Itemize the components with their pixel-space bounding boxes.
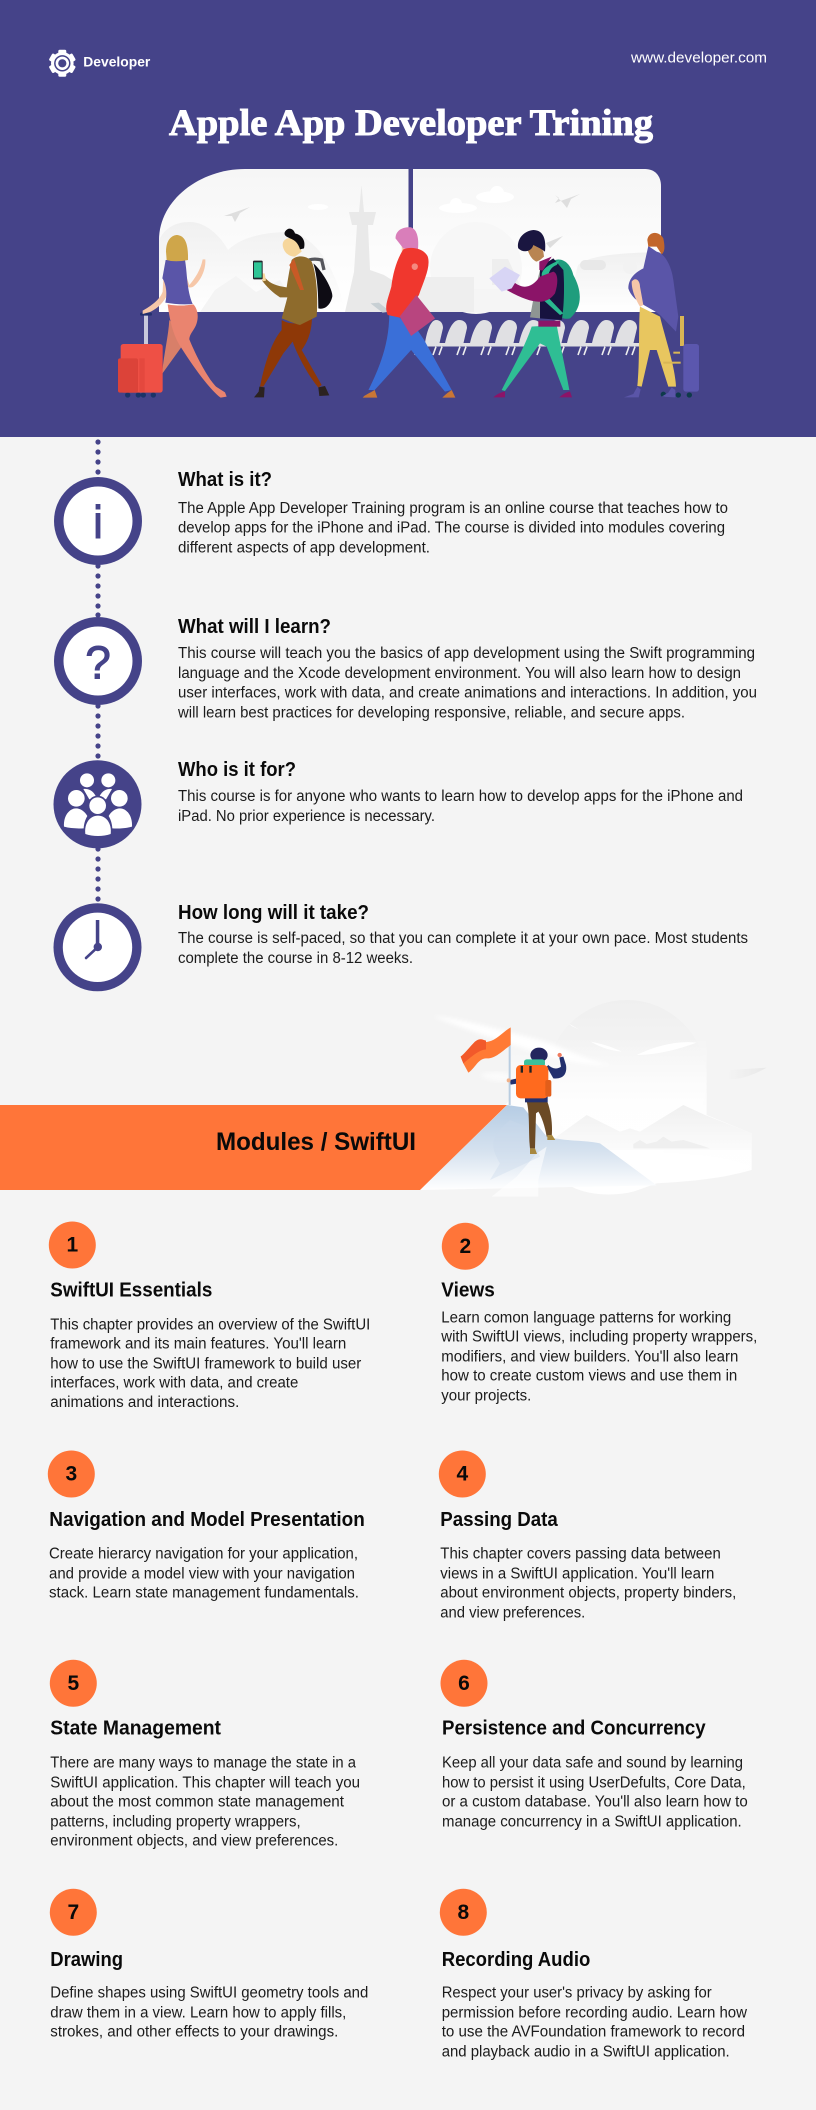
module 1: animations and interactions. xyxy=(50,1394,239,1411)
control tower xyxy=(345,185,400,312)
text: who is it for: iPad. No prior experience is necessary. xyxy=(178,808,435,825)
text: how long will it take xyxy=(178,901,748,967)
logo: gear with Developer wordmark: Developer xyxy=(83,54,151,70)
illustration: woman with red suitcase xyxy=(118,235,227,398)
illustration: woman in purple shawl with suitcase xyxy=(624,233,699,398)
module 3: Navigation and Model Presentation xyxy=(49,1508,365,1531)
module 6: or a custom database. You'll also learn how to xyxy=(442,1793,748,1810)
module 4 xyxy=(439,1450,736,1621)
text: what will I learn: user interfaces, work with data, and create animations and interactions. In addition, you xyxy=(178,685,757,702)
module 5 xyxy=(50,1660,360,1849)
module 4: and view preferences. xyxy=(440,1604,585,1621)
module 8: permission before recording audio. Learn how xyxy=(442,2004,748,2021)
module 3: and provide a model view with your navigation xyxy=(49,1565,355,1582)
clouds xyxy=(308,186,514,213)
text: what is it: What is it? xyxy=(178,468,272,491)
text: what will I learn: language and the Xcode development environment. You will also learn how to design xyxy=(178,665,741,682)
module 2 xyxy=(440,1223,757,1405)
module 1: SwiftUI Essentials xyxy=(50,1279,212,1302)
flag xyxy=(461,1027,511,1105)
module 3: stack. Learn state management fundamentals. xyxy=(49,1584,359,1601)
illustration: climber on mountain xyxy=(420,1000,767,1197)
module 5: State Management xyxy=(50,1717,221,1740)
module 5: environment objects, and view preferences. xyxy=(50,1832,338,1849)
text: what is it: develop apps for the iPhone and iPad. The course is divided into modules covering xyxy=(178,519,725,536)
website url: www.developer.com xyxy=(630,50,767,66)
illustration: man with phone and backpack xyxy=(253,229,332,397)
module 8: and playback audio in a SwiftUI application. xyxy=(442,2043,730,2060)
module 7: Drawing xyxy=(50,1948,123,1971)
module 8: 8 xyxy=(457,1901,469,1924)
module 4: Passing Data xyxy=(440,1508,558,1531)
module 5: about the most common state management xyxy=(50,1793,345,1810)
module 2: your projects. xyxy=(441,1388,531,1405)
module 7: strokes, and other effects to your drawings. xyxy=(50,2023,338,2040)
module 7 xyxy=(50,1889,368,2040)
module 8: Recording Audio xyxy=(442,1948,590,1971)
icon: group of people xyxy=(54,760,142,848)
climber xyxy=(507,1048,566,1154)
text: who is it for: This course is for anyone who wants to learn how to develop apps for the iPhone and xyxy=(178,788,743,805)
module 7: draw them in a view. Learn how to apply fills, xyxy=(50,2004,346,2021)
module 2: with SwiftUI views, including property wrappers, xyxy=(440,1329,757,1346)
module 5: 5 xyxy=(67,1672,79,1695)
panel: header banner xyxy=(0,0,816,437)
distant terminal and hills xyxy=(410,222,661,314)
text: what is it xyxy=(178,468,728,556)
module 5: patterns, including property wrappers, xyxy=(50,1813,301,1830)
text: what will I learn xyxy=(177,615,757,721)
panel: modules banner: Modules / SwiftUI xyxy=(216,1128,416,1156)
module 8: to use the AVFoundation framework to record xyxy=(442,2023,745,2040)
module 2: Views xyxy=(441,1279,495,1302)
logo: gear with Developer wordmark xyxy=(49,50,151,77)
icon: info xyxy=(54,477,142,565)
module 8: Respect your user's privacy by asking for xyxy=(442,1984,712,2001)
text: who is it for xyxy=(178,758,743,825)
icon: question mark xyxy=(54,617,142,705)
module 4: views in a SwiftUI application. You'll learn xyxy=(440,1565,714,1582)
text: what will I learn: will learn best practices for developing responsive, reliable, and secure apps. xyxy=(177,704,685,721)
module 6: 6 xyxy=(458,1672,470,1695)
text: what is it: different aspects of app development. xyxy=(178,539,430,556)
title: Apple App Developer Trining xyxy=(169,103,654,144)
module 1: framework and its main features. You'll learn xyxy=(50,1335,346,1352)
module 2: Learn comon language patterns for working xyxy=(441,1310,731,1327)
text: what is it: The Apple App Developer Training program is an online course that teaches how to xyxy=(178,500,728,517)
module 1: interfaces, work with data, and create xyxy=(50,1374,298,1391)
text: what will I learn: This course will teach you the basics of app development using the Swift programming xyxy=(178,645,755,662)
illustration: man reading with green backpack xyxy=(489,230,580,397)
icon: question mark: ? xyxy=(85,636,111,688)
panel: modules banner xyxy=(0,1105,507,1190)
window divider xyxy=(408,169,413,249)
module 4: about environment objects, property binders, xyxy=(440,1584,736,1601)
icon: clock xyxy=(54,903,142,991)
illustration: airport window xyxy=(159,169,661,314)
module 7: 7 xyxy=(67,1901,79,1924)
module 5: There are many ways to manage the state in a xyxy=(50,1754,356,1771)
module 5: SwiftUI application. This chapter will teach you xyxy=(50,1774,360,1791)
illustration: seats xyxy=(413,320,657,355)
module 3: Create hierarcy navigation for your application, xyxy=(49,1545,358,1562)
module 3 xyxy=(48,1450,365,1601)
module 3: 3 xyxy=(65,1463,77,1486)
module 1: how to use the SwiftUI framework to build user xyxy=(50,1355,361,1372)
module 4: This chapter covers passing data between xyxy=(440,1545,721,1562)
panel: intro timeline xyxy=(54,439,757,991)
module 2: how to create custom views and use them in xyxy=(441,1368,737,1385)
text: how long will it take: The course is self-paced, so that you can complete it at your own pace. Most students xyxy=(178,930,748,947)
module 8 xyxy=(440,1889,748,2060)
text: who is it for: Who is it for? xyxy=(178,758,296,781)
module 6: manage concurrency in a SwiftUI application. xyxy=(442,1813,742,1830)
dotted connector xyxy=(95,439,101,902)
module 4: 4 xyxy=(456,1463,468,1486)
module 6: Persistence and Concurrency xyxy=(442,1717,706,1740)
module 2: 2 xyxy=(459,1235,471,1258)
module 7: Define shapes using SwiftUI geometry tools and xyxy=(50,1984,368,2001)
module 6: how to persist it using UserDefults, Core Data, xyxy=(442,1774,746,1791)
module 6 xyxy=(440,1660,748,1830)
text: what will I learn: What will I learn? xyxy=(178,615,331,638)
module 2: modifiers, and view builders. You'll also learn xyxy=(441,1349,738,1366)
module 1 xyxy=(49,1222,370,1411)
module 6: Keep all your data safe and sound by learning xyxy=(442,1754,743,1771)
module 1: This chapter provides an overview of the SwiftUI xyxy=(50,1316,370,1333)
text: how long will it take: How long will it take? xyxy=(178,901,369,924)
planes xyxy=(224,194,580,248)
module 1: 1 xyxy=(66,1234,78,1257)
text: how long will it take: complete the course in 8-12 weeks. xyxy=(178,950,413,967)
illustration: woman in red jacket with bag xyxy=(363,227,455,398)
